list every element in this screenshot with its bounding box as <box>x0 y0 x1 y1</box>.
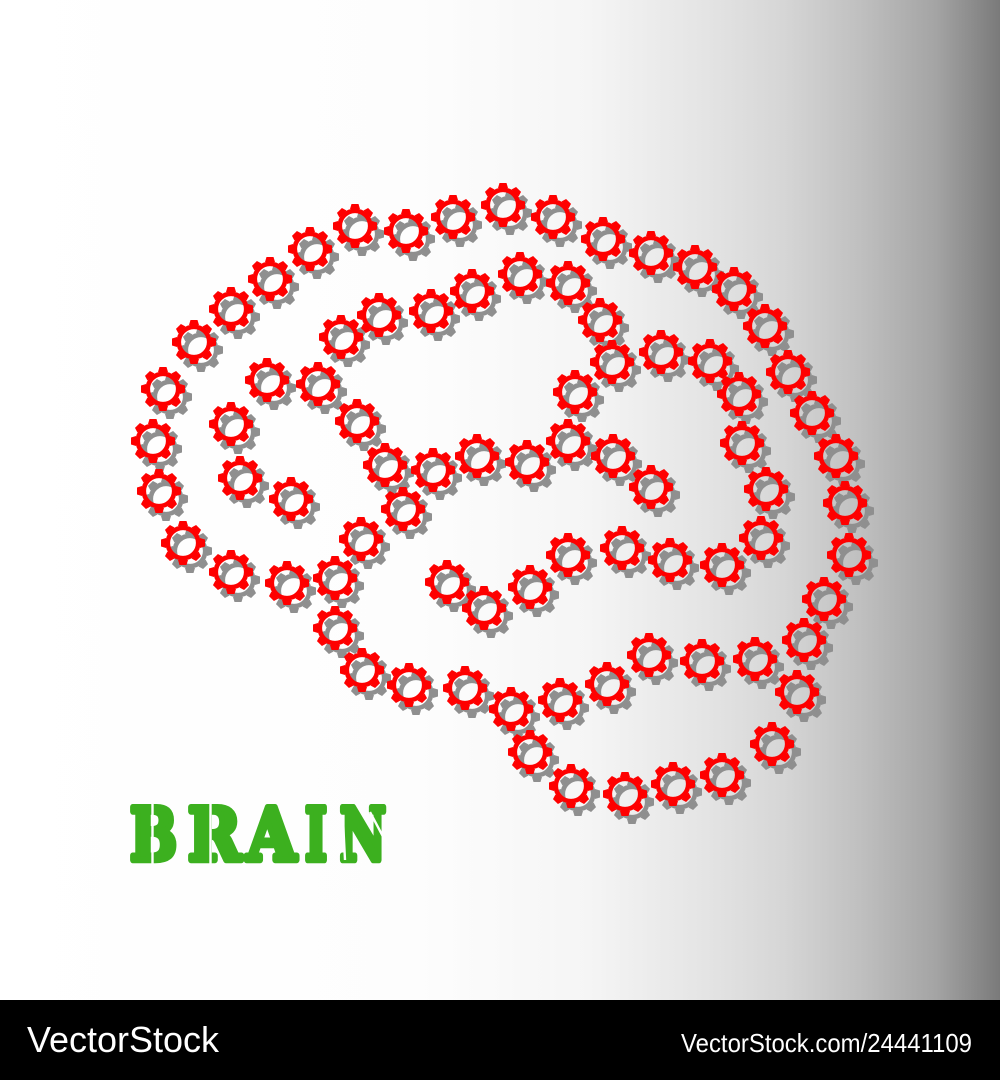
watermark bar <box>0 1000 1000 1080</box>
title: BRAIN: I <box>305 792 327 877</box>
gear brain illustration <box>131 183 878 824</box>
watermark logo text: VectorStock <box>27 1019 220 1060</box>
title: BRAIN: A <box>246 792 297 877</box>
red gears <box>131 183 871 816</box>
title: BRAIN: N <box>340 792 386 877</box>
gear shadows <box>138 191 878 824</box>
title: BRAIN: B <box>130 792 177 877</box>
title: BRAIN: R <box>188 792 242 877</box>
watermark url text: VectorStock.com/24441109 <box>681 1028 972 1058</box>
title: BRAIN <box>130 792 388 877</box>
